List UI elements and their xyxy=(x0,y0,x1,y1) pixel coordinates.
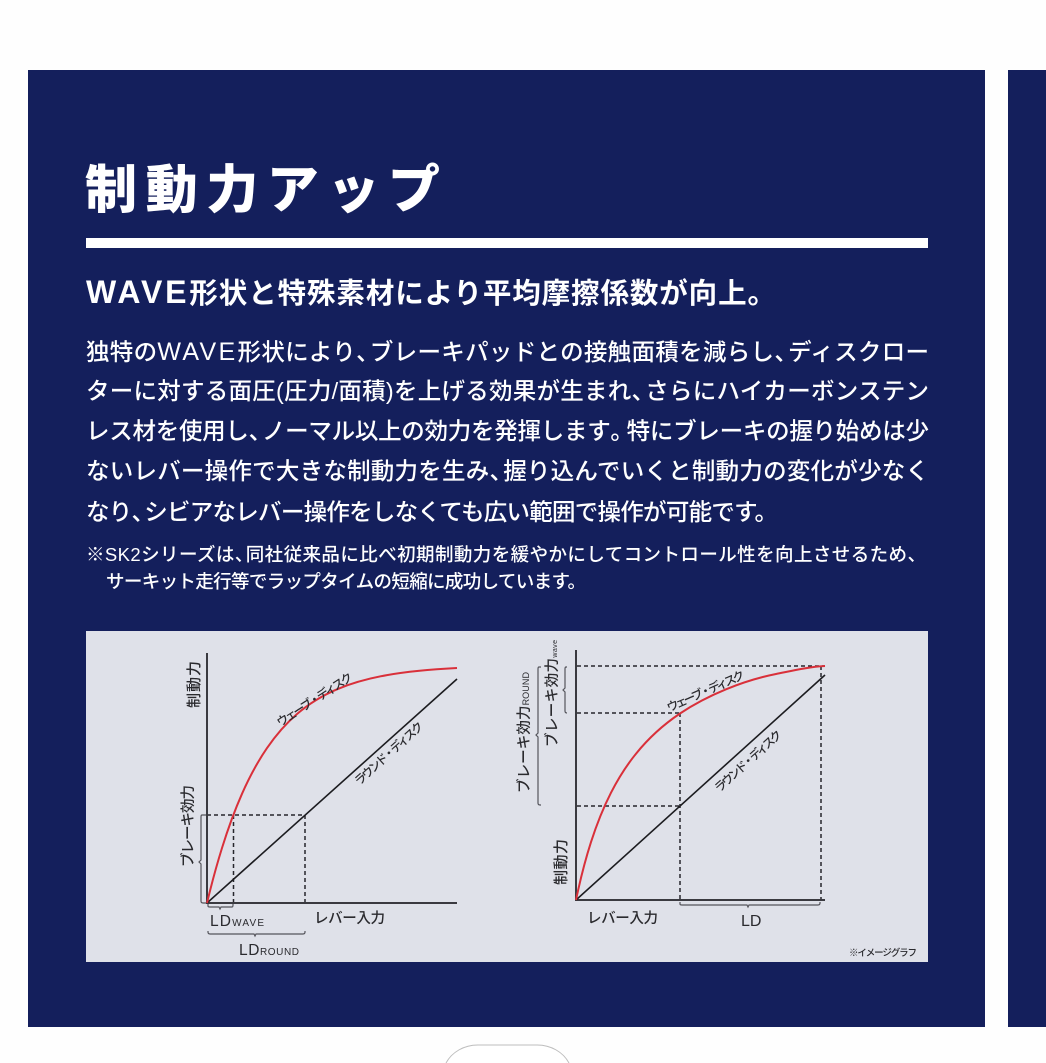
body text block: ないレバー操作で大きな制動力を生み、握り込んでいくと制動力の変化が少なく xyxy=(86,458,929,484)
rounded button outline xyxy=(446,1045,569,1063)
subheading: WAVE形状と特殊素材により平均摩擦係数が向上。 xyxy=(86,274,776,310)
chart: right, brake effect comparison xyxy=(515,640,825,930)
label: wave disc: ウェーブ・ディスク xyxy=(664,667,747,715)
brace: brake effect xyxy=(199,815,206,903)
body text block: ターに対する面圧(圧力/面積)を上げる効果が生まれ、さらにハイカーボンステン xyxy=(86,378,929,404)
brace: LD range xyxy=(680,902,820,907)
label: round disc: ラウンド・ディスク xyxy=(711,727,785,795)
label: LD: LD xyxy=(741,913,761,930)
label: LD round: LDROUND xyxy=(239,942,299,959)
label: brake effect wave: ブレーキ効力wave xyxy=(543,640,561,747)
body text block: 独特のWAVE形状により、ブレーキパッドとの接触面積を減らし、ディスクロー xyxy=(86,338,929,366)
label: wave disc: ウェーブ・ディスク xyxy=(273,669,355,730)
panel: adjacent navy card xyxy=(1008,70,1046,1027)
footnote: ※SK2シリーズは、同社従来品に比べ初期制動力を緩やかにしてコントロール性を向上させるため、 xyxy=(86,544,926,565)
heading rule xyxy=(86,238,928,248)
label: braking force axis: 制動力 xyxy=(186,661,203,708)
body text block: なり、シビアなレバー操作をしなくても広い範囲で操作が可能です。 xyxy=(86,499,778,525)
footnote xyxy=(86,544,926,592)
brace: wave range xyxy=(563,667,567,713)
label: brake effect round: ブレーキ効力ROUND xyxy=(515,672,533,793)
footnote: サーキット走行等でラップタイムの短縮に成功しています。 xyxy=(106,571,586,592)
label: round disc: ラウンド・ディスク xyxy=(351,718,426,788)
label: braking force axis: 制動力 xyxy=(553,839,570,885)
brace: LD wave xyxy=(208,904,233,909)
image graph note: ※イメージグラフ xyxy=(849,947,917,959)
chart: left, brake lever input xyxy=(179,653,457,959)
label: brake effect: ブレーキ効力 xyxy=(179,785,197,867)
label: lever input: レバー入力 xyxy=(314,910,385,927)
brace: LD round xyxy=(208,931,305,936)
brace: round range xyxy=(536,667,541,805)
title: 制動力アップ xyxy=(85,162,440,220)
body text block: レス材を使用し、ノーマル以上の効力を発揮します。特にブレーキの握り始めは少 xyxy=(86,417,929,444)
label: LD wave: LDWAVE xyxy=(210,913,264,930)
label: lever input: レバー入力 xyxy=(587,910,658,927)
chart panel background xyxy=(86,631,928,962)
body text block xyxy=(86,338,929,525)
